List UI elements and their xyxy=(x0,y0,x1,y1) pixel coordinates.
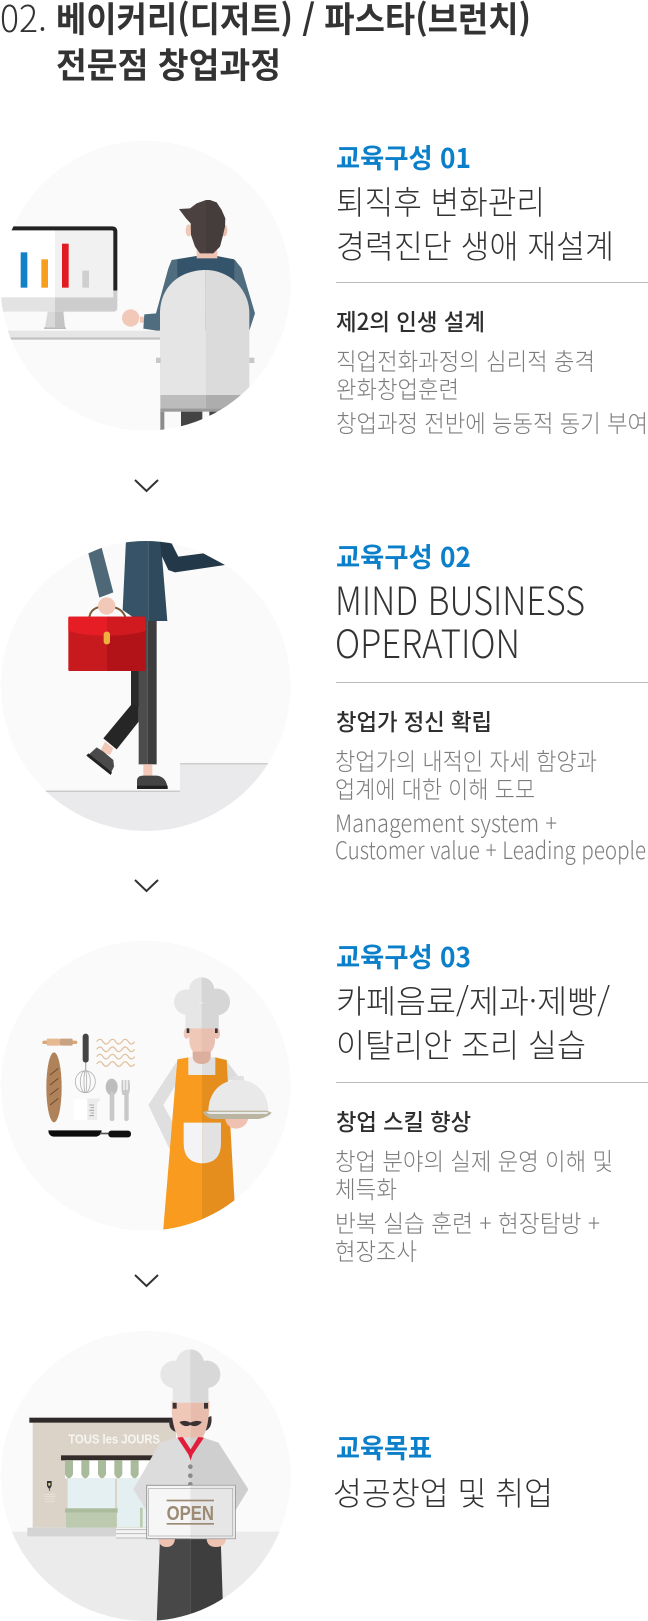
panel: course 03 text: 교육구성 03 xyxy=(336,936,471,975)
illustration: man at desk with monitor xyxy=(1,200,255,430)
figure: chef with moustache xyxy=(133,1349,248,1621)
icon: whisk xyxy=(75,1034,95,1093)
panel: course 01 text: 제2의 인생 설계 xyxy=(336,303,485,337)
panel: course 01 text: 경력진단 생애 재설계 xyxy=(336,221,614,268)
panel: course 01 text: 퇴직후 변화관리 xyxy=(336,177,545,224)
panel: course 03 text: 창업 분야의 실제 운영 이해 및 xyxy=(335,1142,613,1177)
illustration: walking legs with red briefcase xyxy=(46,541,268,831)
panel: course 03 text xyxy=(335,936,648,1267)
panel: course 01 text xyxy=(336,137,648,439)
panel: course 02 text: 교육구성 02 xyxy=(336,536,471,575)
panel: course 02 text: Management system + xyxy=(335,804,557,839)
icon: frying pan xyxy=(48,1130,131,1137)
panel: course 02 text: 창업가 정신 확립 xyxy=(336,703,492,737)
icon: measuring cup xyxy=(88,1098,100,1120)
icon: spoon and fork xyxy=(106,1079,130,1121)
panel: course 02 text: MIND BUSINESS xyxy=(335,571,585,627)
illustration: chef with cloche and kitchen tools xyxy=(42,977,272,1230)
store building xyxy=(27,1418,176,1538)
panel: course 02 text: OPERATION xyxy=(335,614,520,670)
icon: rolling pin xyxy=(42,1039,77,1046)
panel: course goal text: 교육목표 xyxy=(336,1427,432,1466)
panel: course 03 text: 창업 스킬 향상 xyxy=(336,1103,471,1137)
panel: course 03 text: 현장조사 xyxy=(335,1232,417,1267)
title: 전문점 창업과정 xyxy=(56,38,281,89)
open sign: OPEN xyxy=(167,1502,214,1525)
arrow: down chevron 3 xyxy=(135,1275,158,1286)
panel: course 02 text: 창업가의 내적인 자세 함양과 xyxy=(335,742,597,777)
icon: pasta waves xyxy=(97,1039,135,1066)
store building: TOUS les JOURS xyxy=(68,1432,160,1447)
panel: course goal text: 성공창업 및 취업 xyxy=(333,1468,553,1515)
panel: course goal text xyxy=(333,1427,553,1515)
icon: baguette xyxy=(46,1052,62,1122)
panel: course 03 text: 체득화 xyxy=(335,1170,397,1205)
arrow: down chevron 2 xyxy=(135,880,158,891)
panel: course 03 text: 카페음료/제과·제빵/ xyxy=(336,976,610,1023)
panel: course 02 text xyxy=(335,536,648,866)
panel: course 01 text: 교육구성 01 xyxy=(336,137,471,176)
arrow: down chevron 1 xyxy=(135,480,158,491)
panel: course 01 text: 완화창업훈련 xyxy=(336,370,459,405)
panel: course 03 text: 이탈리안 조리 실습 xyxy=(336,1020,586,1067)
open sign xyxy=(147,1485,235,1539)
figure: chef xyxy=(148,977,272,1237)
title xyxy=(0,0,531,89)
panel: course 01 text: 직업전화과정의 심리적 충격 xyxy=(336,342,595,377)
illustration: chef with open sign in front of store xyxy=(12,1349,280,1621)
panel: course 03 text: 반복 실습 훈련 + 현장탐방 + xyxy=(335,1204,600,1239)
panel: course 02 text: 업계에 대한 이해 도모 xyxy=(335,770,535,805)
